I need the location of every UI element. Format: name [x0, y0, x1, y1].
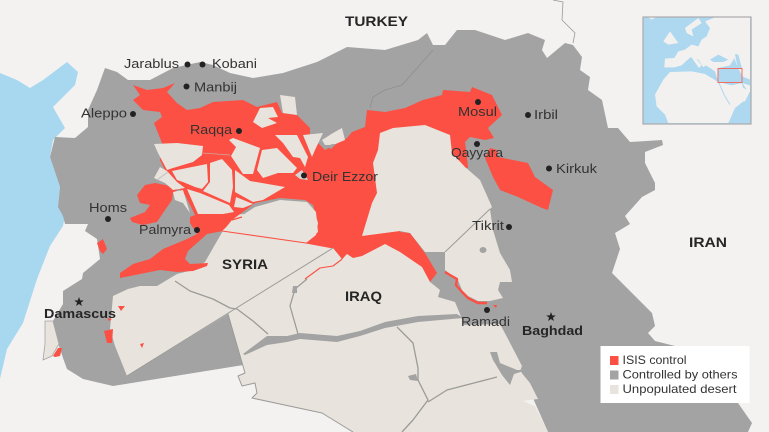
city: Damascus	[44, 297, 116, 321]
legend item: Controlled by others: Controlled by others	[622, 368, 738, 382]
city: Qayyara: Qayyara	[451, 145, 504, 160]
Deir Ezzor pocket	[295, 170, 308, 180]
label: Iran: IRAN	[689, 234, 727, 250]
region: desert strip near Lebanon border	[43, 321, 59, 360]
label: Syria: SYRIA	[222, 256, 268, 272]
city: Raqqa: Raqqa	[190, 122, 233, 137]
legend item: Unpopulated desert: Unpopulated desert	[622, 382, 737, 396]
city: Mosul: Mosul	[458, 104, 497, 119]
legend item: ISIS control: ISIS control	[622, 353, 686, 367]
city: Mosul	[458, 99, 497, 119]
city: Damascus: Damascus	[44, 306, 116, 321]
region: small ISIS pockets	[53, 239, 497, 357]
city: Tikrit	[472, 218, 512, 233]
city: Tikrit: Tikrit	[472, 218, 504, 233]
inset locator map	[643, 17, 751, 124]
thin ISIS lines along roads and rivers	[222, 217, 487, 303]
label: Iraq: IRAQ	[345, 288, 382, 304]
city: Kobani: Kobani	[212, 56, 257, 71]
region: ISIS control west of Palmyra	[130, 183, 180, 225]
desert pockets inside ISIS territory	[154, 95, 512, 301]
city: Ramadi	[461, 307, 510, 329]
sea: Mediterranean	[0, 62, 78, 379]
city: Deir Ezzor: Deir Ezzor	[312, 169, 379, 184]
borders and roads	[127, 153, 497, 432]
grey lake near Tikrit	[480, 247, 486, 253]
legend	[600, 346, 750, 403]
city: Jarablus: Jarablus	[124, 56, 180, 71]
region: ISIS control main	[120, 83, 502, 282]
city: Palmyra: Palmyra	[139, 222, 192, 237]
city: Kirkuk: Kirkuk	[556, 161, 598, 176]
river corridors in grey	[243, 286, 527, 385]
city: Baghdad: Baghdad	[522, 323, 583, 338]
label: Turkey: TURKEY	[345, 13, 409, 29]
grey pocket near Deir Ezzor	[326, 144, 336, 149]
region: unpopulated desert, south	[110, 210, 548, 432]
Syria-Iraq northern border	[370, 50, 433, 108]
city: Homs: Homs	[89, 200, 128, 215]
region: ISIS control near Kirkuk	[485, 148, 553, 210]
city: Ramadi: Ramadi	[461, 314, 510, 329]
city: Homs	[89, 200, 128, 222]
city: Baghdad	[522, 312, 583, 338]
city: Irbil: Irbil	[534, 107, 558, 122]
city: Manbij: Manbij	[194, 80, 237, 94]
Turkey-Iran border	[553, 0, 575, 43]
city: Aleppo: Aleppo	[81, 106, 127, 120]
city: Irbil	[525, 107, 558, 122]
